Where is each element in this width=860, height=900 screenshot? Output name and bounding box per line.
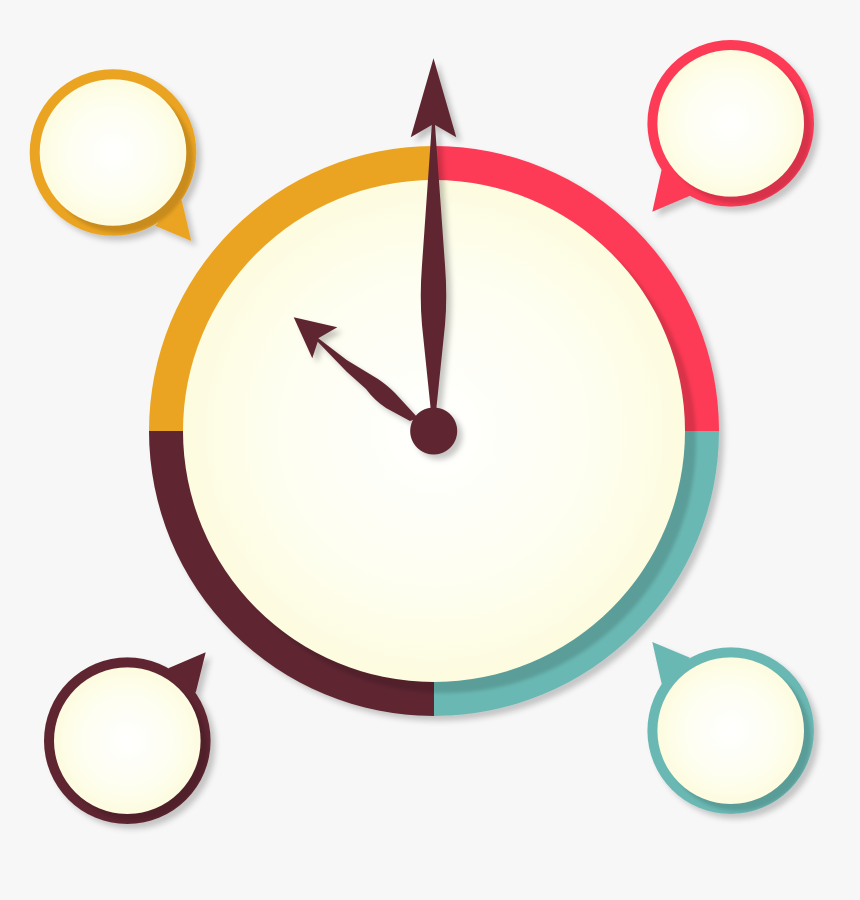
- bubble face: [54, 667, 201, 814]
- bubble: teal bottom right: [647, 642, 814, 814]
- ring segment: red: [434, 146, 719, 431]
- clock face: [183, 180, 685, 682]
- bubble face: [657, 50, 804, 197]
- bubble outline: [44, 652, 211, 824]
- bubble face: [657, 657, 804, 804]
- face shadow on ring: [272, 248, 697, 694]
- clock dial: [149, 146, 719, 716]
- bubble: red top right: [647, 40, 814, 212]
- inner shadow: [60, 99, 194, 234]
- ring segment: teal: [434, 431, 719, 716]
- bubble outline: [647, 642, 814, 814]
- clock ring: [149, 146, 719, 716]
- hour hand: [294, 317, 418, 421]
- center pin: [410, 408, 457, 454]
- bubble outline: [30, 69, 196, 241]
- bubble: orange top left: [30, 69, 196, 241]
- bubble outline: [647, 40, 814, 212]
- bubble face: [40, 79, 186, 226]
- inner shadow: [677, 70, 812, 205]
- inner shadow: [680, 679, 812, 812]
- clock hands: [294, 58, 457, 455]
- minute hand: [411, 58, 456, 412]
- inner shadow: [84, 696, 207, 820]
- ring segment: orange: [149, 146, 434, 431]
- ring segment: maroon: [149, 431, 434, 716]
- bubble: maroon bottom left: [44, 652, 211, 824]
